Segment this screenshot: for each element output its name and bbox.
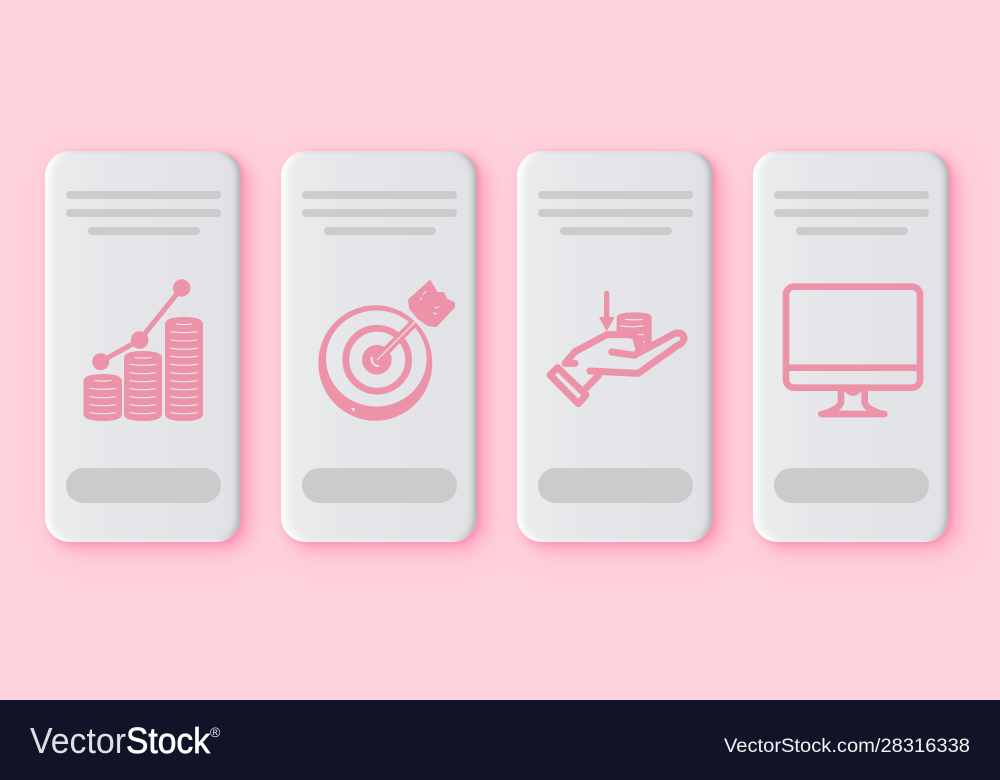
icon: desktop monitor [782,283,924,418]
panel: card 2 target [281,151,477,542]
text placeholder lines [538,191,693,235]
button placeholder [538,468,693,502]
panel: card 1 growth [45,151,241,542]
icon: hand holding coins [546,290,688,408]
footer watermark text: Vector [30,720,126,761]
panel: card 4 monitor [753,151,949,542]
panel: card 3 hand with coins [517,151,713,542]
button placeholder [302,468,457,502]
text placeholder lines [302,191,457,235]
footer watermark text: Stock [126,720,211,761]
footer watermark text [30,720,970,761]
text placeholder lines [66,191,221,235]
text placeholder lines [774,191,929,235]
footer bar [0,700,1000,780]
footer watermark text: ® [210,724,221,740]
icon: target with arrow [318,280,455,421]
button placeholder [774,468,929,502]
button placeholder [66,468,221,502]
footer watermark text: VectorStock.com/28316338 [724,735,970,757]
icon: coin stacks with rising line [84,279,203,421]
